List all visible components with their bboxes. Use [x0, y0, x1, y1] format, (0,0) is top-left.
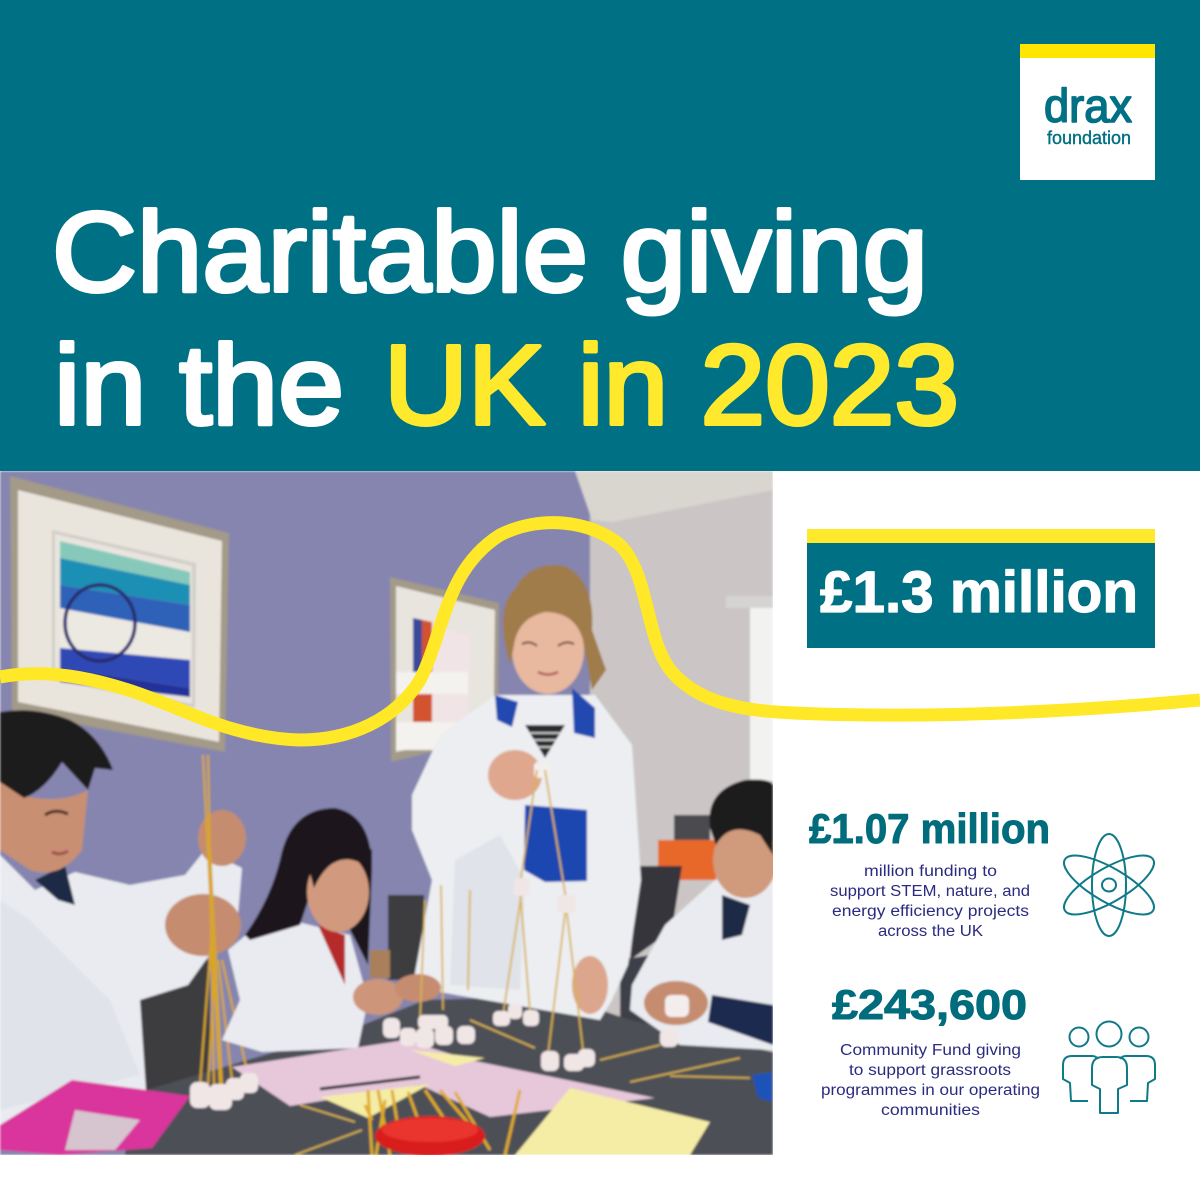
- stat box: £1.3 million: [807, 529, 1155, 648]
- title: UK in 2023: [384, 322, 959, 448]
- description: Community Fund: programmes in our operating: [821, 1082, 1040, 1099]
- description: STEM funding: million funding to: [864, 863, 997, 880]
- description: Community Fund: communities: [881, 1102, 980, 1119]
- photo: children building spaghetti and marshmallow towers: [0, 471, 777, 1156]
- title: [52, 189, 959, 448]
- description: Community Fund: [821, 1042, 1040, 1119]
- pen and blue clip: [320, 1072, 772, 1102]
- stat: £1.07 million: [809, 805, 1050, 940]
- spaghetti tower centre: [295, 770, 750, 1155]
- woman: [410, 565, 641, 1020]
- marshmallow bag: [0, 1080, 190, 1155]
- logo: drax foundation: drax: [1044, 79, 1132, 132]
- yellow papers: [320, 1050, 710, 1155]
- girl: [222, 808, 441, 1052]
- loose spaghetti pile: [365, 1090, 520, 1155]
- stat box: £1.3 million: £1.3 million: [820, 560, 1138, 625]
- icon: people: [1063, 1022, 1155, 1113]
- stat: £243,600: [821, 981, 1040, 1119]
- description: STEM funding: support STEM, nature, and: [830, 883, 1030, 900]
- stat: £243,600: £243,600: [832, 981, 1027, 1028]
- pink paper: [232, 1040, 655, 1117]
- boy on the left: [0, 710, 246, 1125]
- title: Charitable giving: [52, 189, 928, 315]
- yellow wave line: [0, 523, 1200, 740]
- chair and orange box behind right boy: [620, 815, 716, 1030]
- red lid: [375, 1116, 485, 1156]
- description: Community Fund: Community Fund giving: [840, 1042, 1021, 1059]
- boy on the right: [630, 780, 777, 1050]
- spaghetti tower left: [200, 755, 248, 1085]
- marshmallows: [190, 878, 678, 1110]
- framed picture centre: [390, 577, 499, 762]
- wall: [0, 471, 600, 1155]
- title: in the: [54, 322, 344, 448]
- header band: [0, 0, 1200, 471]
- table: [125, 996, 773, 1155]
- right wall and ceiling: [574, 471, 773, 1052]
- logo: drax foundation: [1020, 44, 1155, 180]
- description: STEM funding: [830, 863, 1030, 940]
- framed picture left: [10, 476, 229, 752]
- description: STEM funding: energy efficiency projects: [832, 903, 1029, 920]
- chair behind girl: [140, 895, 424, 1090]
- description: STEM funding: across the UK: [878, 923, 984, 940]
- icon: atom: [1056, 834, 1162, 936]
- description: Community Fund: to support grassroots: [849, 1062, 1011, 1079]
- stat: £1.07 million: £1.07 million: [809, 805, 1050, 852]
- logo: drax foundation: foundation: [1047, 127, 1131, 148]
